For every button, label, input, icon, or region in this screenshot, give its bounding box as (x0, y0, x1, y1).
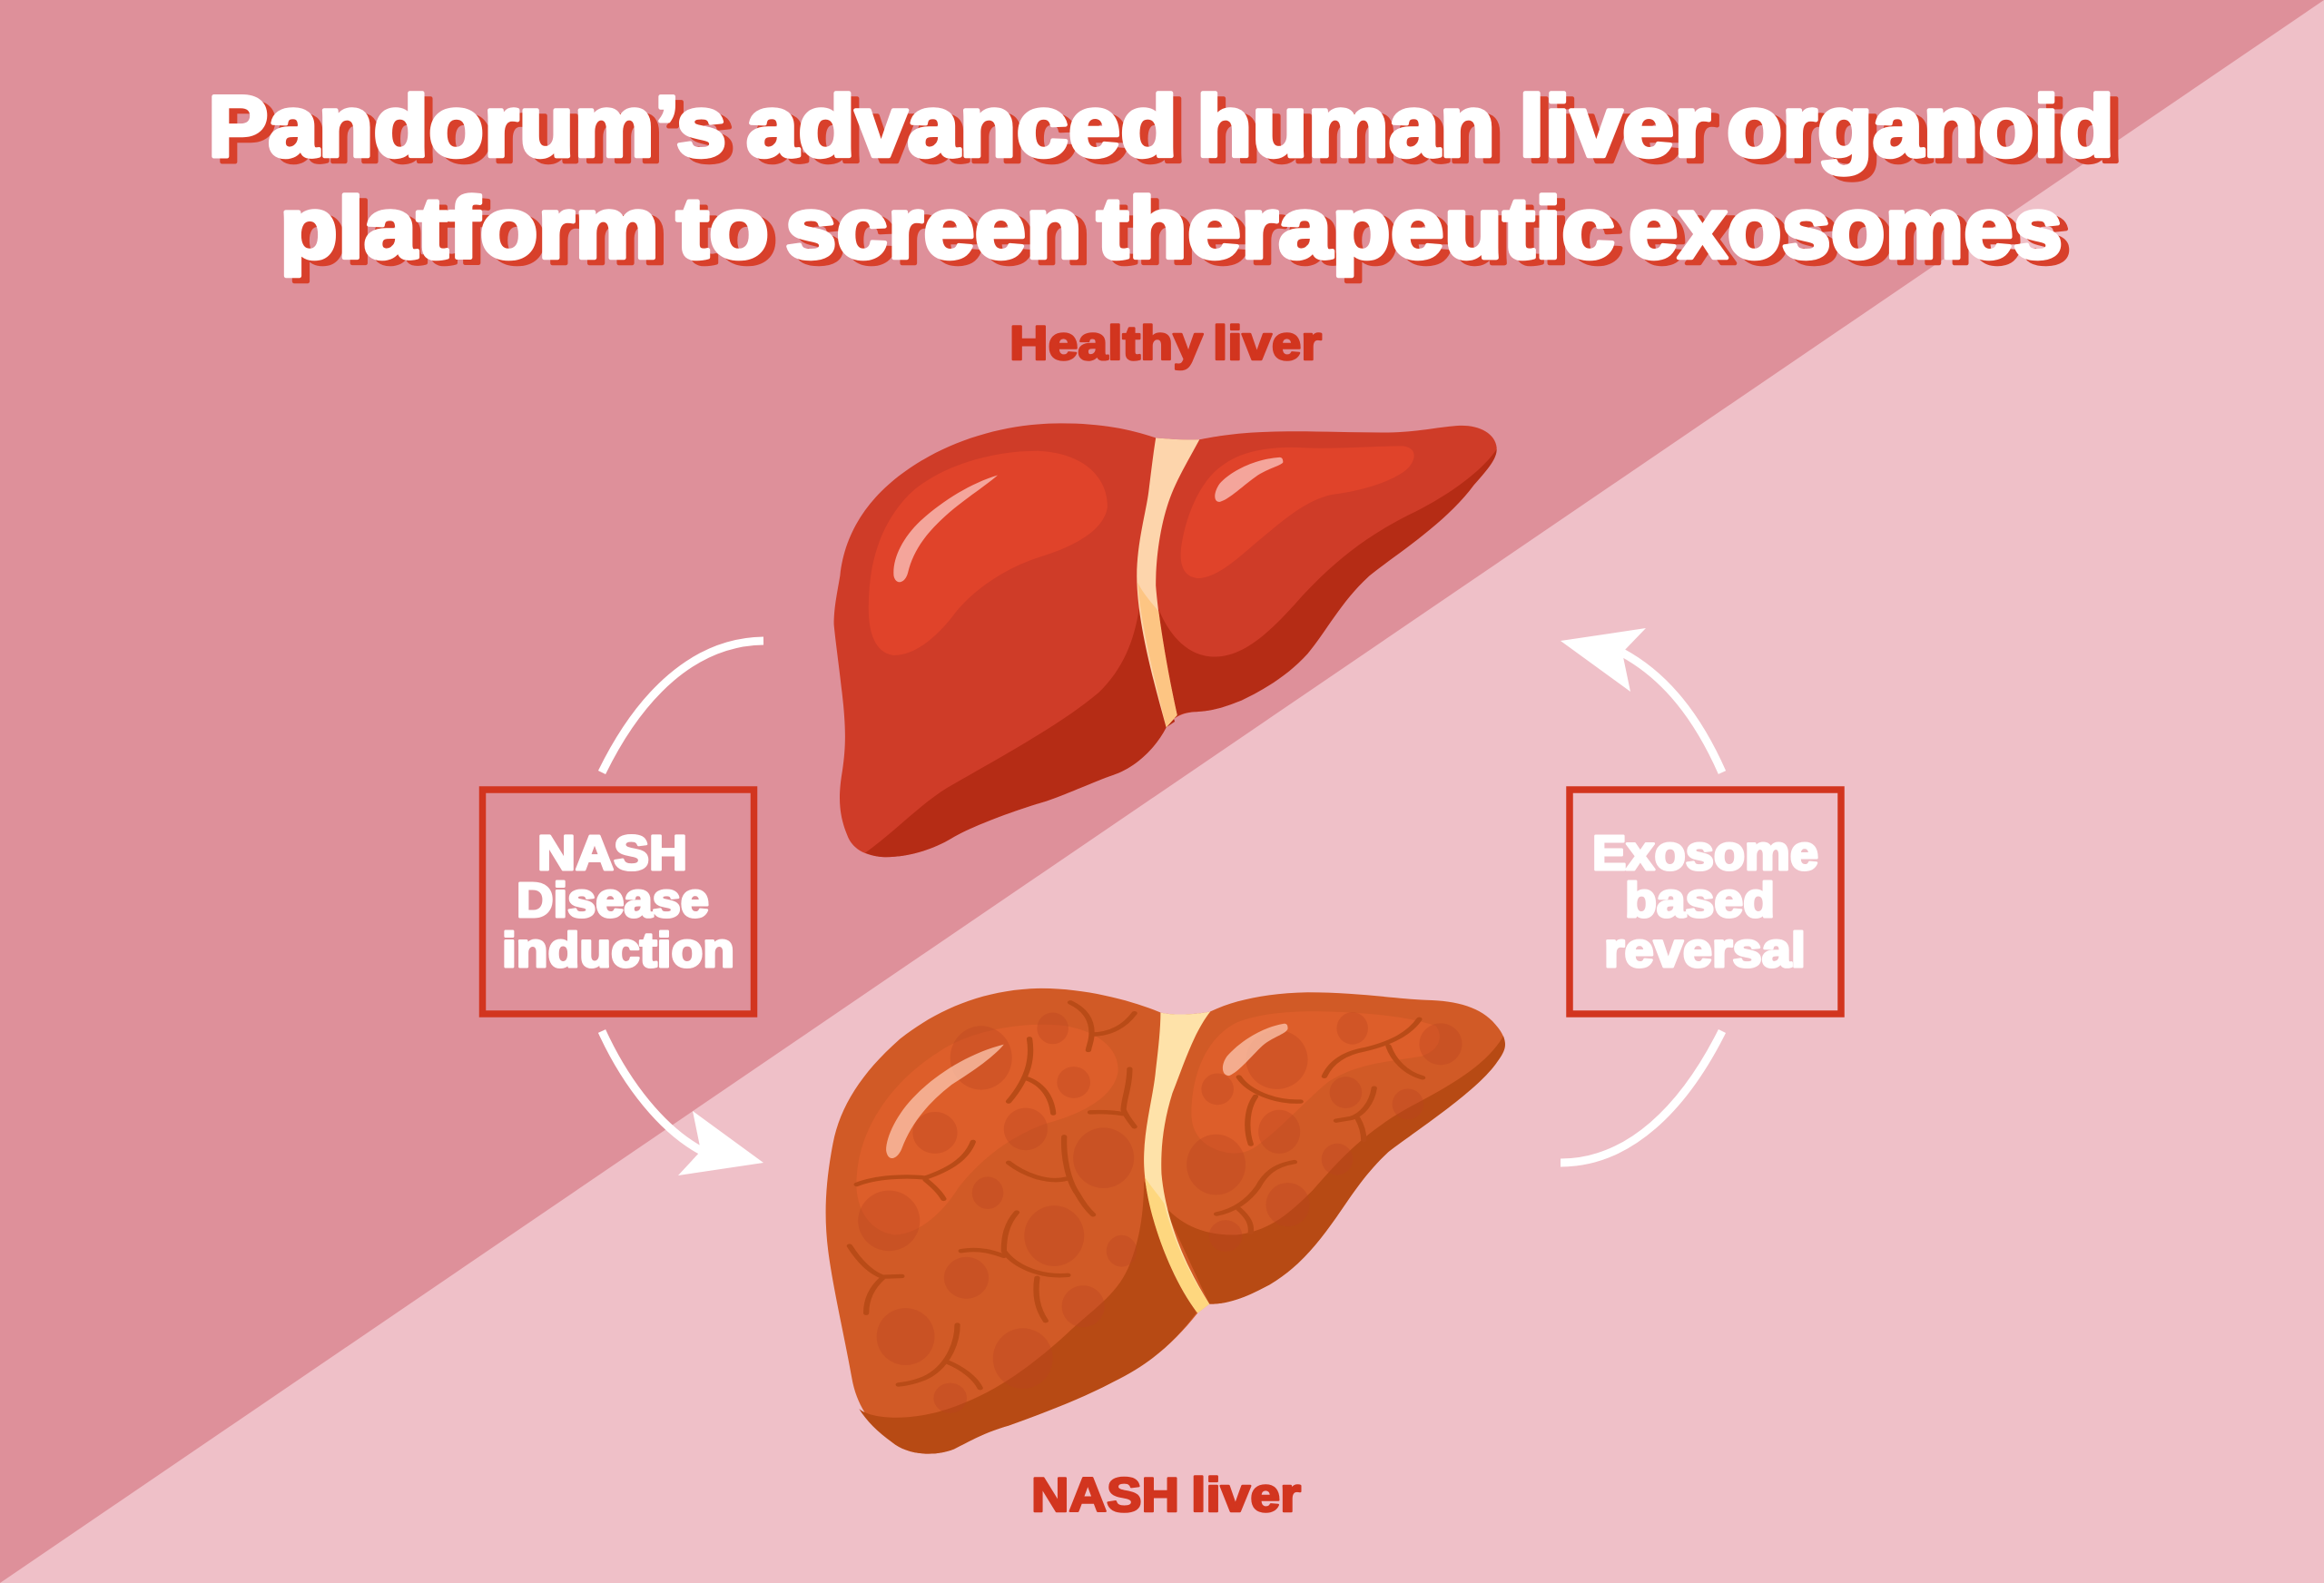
icon: NASH liver (826, 988, 1505, 1454)
label box: exosome based reversal: Exosome (1592, 826, 1818, 880)
label box: exosome based reversal (1570, 790, 1841, 1014)
title: therapeutic (1097, 180, 1615, 277)
heading: healthy liver (1009, 317, 1322, 370)
title: human (1196, 78, 1495, 175)
title: screen (785, 180, 1082, 277)
label box: exosome based reversal: reversal (1604, 923, 1806, 978)
title: platform (280, 180, 659, 277)
arrow: bottom right arc (1561, 1031, 1722, 1163)
label box: NASH disease induction: NASH (537, 826, 687, 880)
label box: NASH disease induction: induction (502, 923, 734, 978)
title: exosomes (1629, 180, 2063, 277)
heading: NASH liver: liver (1191, 1469, 1301, 1522)
arrow: bottom left arc with head (602, 1031, 763, 1175)
arrow: top right arc with head (1561, 628, 1722, 772)
title: to (676, 180, 769, 277)
icon: healthy liver (834, 423, 1497, 857)
label box: NASH disease induction (483, 790, 753, 1014)
heading: NASH liver (1031, 1469, 1301, 1522)
arrow: top left arc (602, 641, 763, 772)
title (208, 78, 2114, 277)
label box: NASH disease induction: Disease (517, 873, 709, 928)
heading: NASH liver: NASH (1031, 1469, 1179, 1522)
heading: healthy liver: liver (1213, 317, 1322, 370)
heading: healthy liver: Healthy (1009, 317, 1204, 370)
title: advanced (746, 78, 1177, 175)
label box: exosome based reversal: based (1625, 873, 1775, 928)
title: Pandorum’s (208, 78, 726, 175)
title: organoid (1727, 78, 2114, 175)
title: liver (1519, 78, 1710, 175)
